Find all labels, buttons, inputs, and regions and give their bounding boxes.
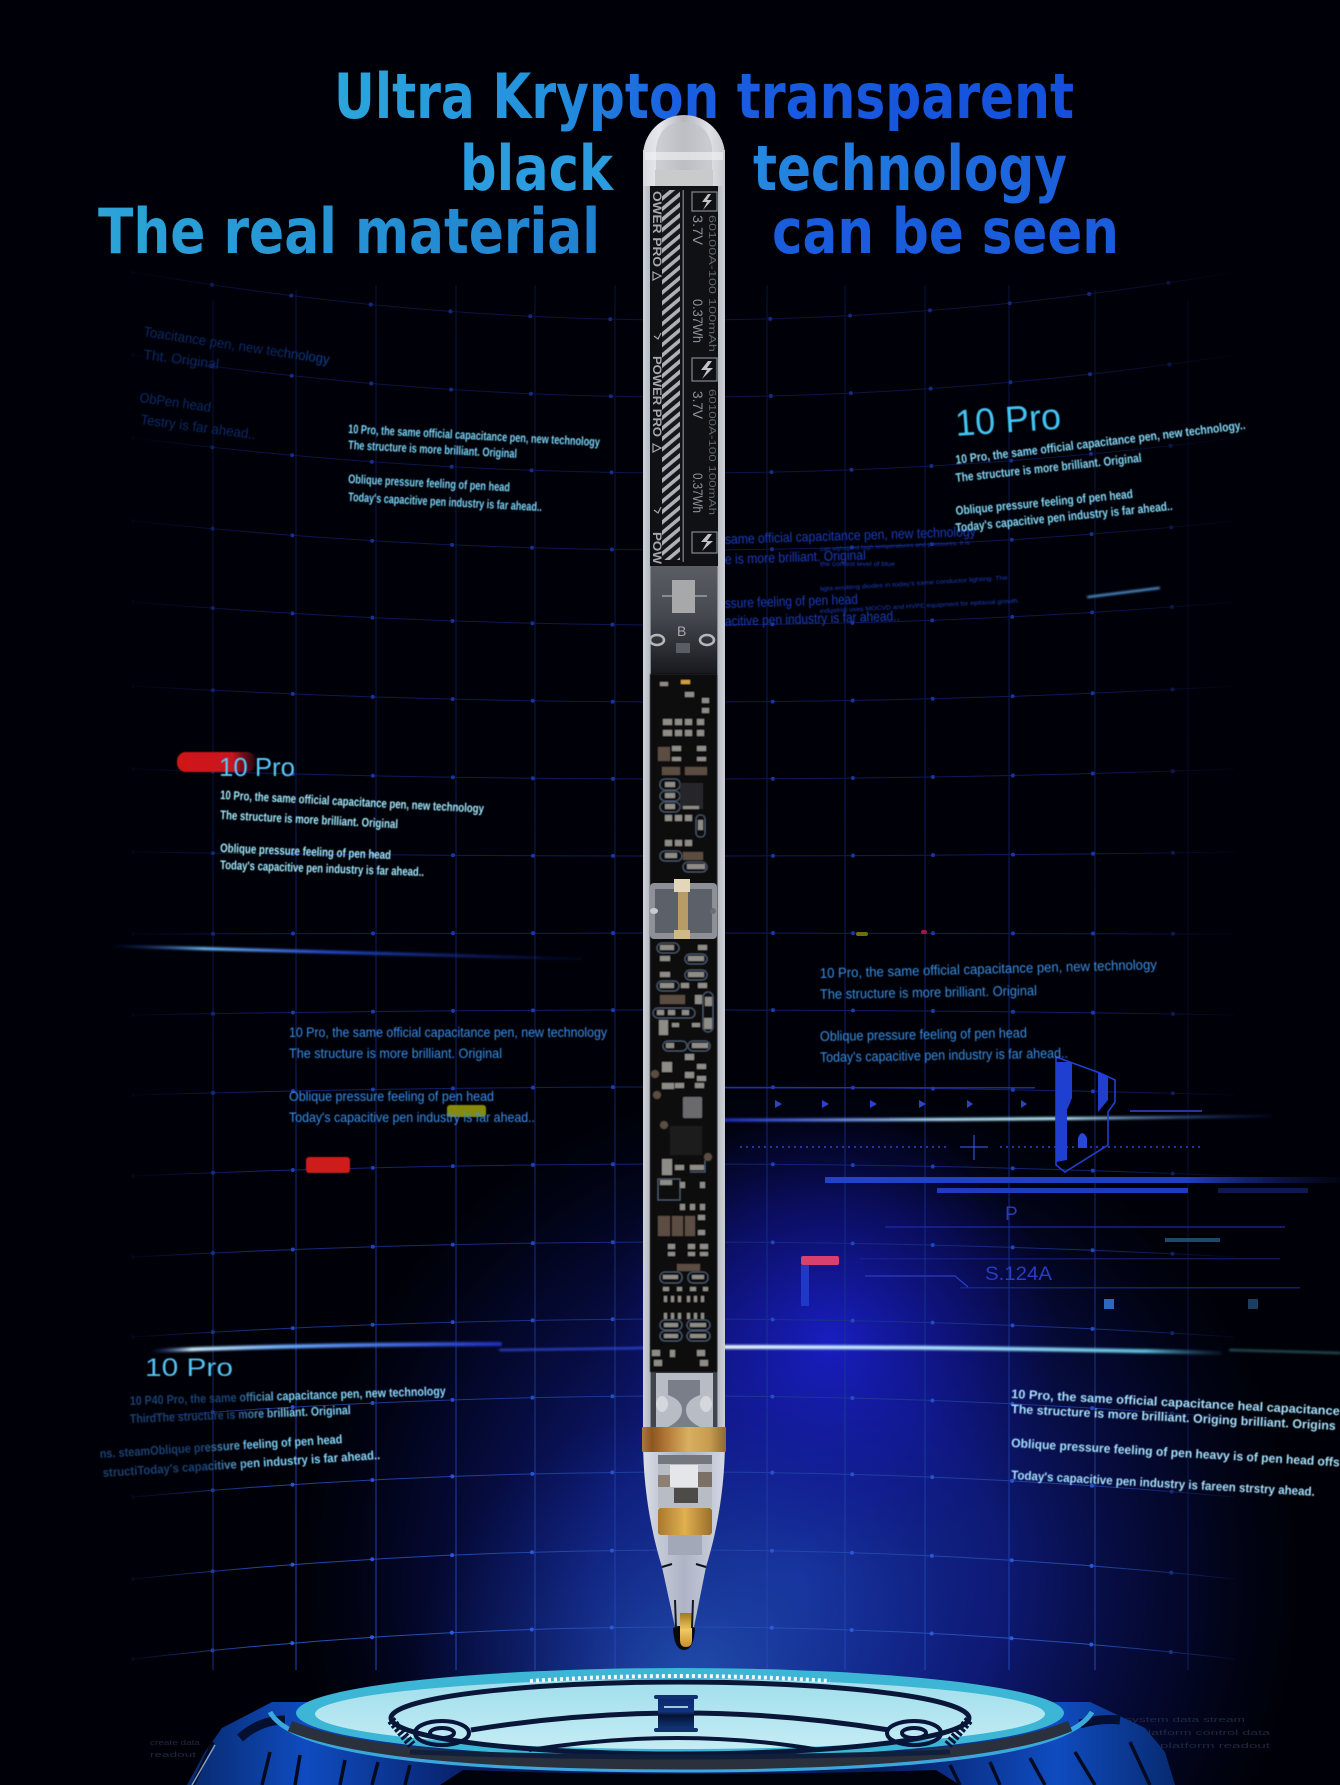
pen shaft detail (662, 1535, 706, 1567)
pen gold knurl (658, 1508, 712, 1535)
pen upper connector: B (677, 623, 686, 639)
red marker (801, 1256, 839, 1265)
dim HUD text near platform: readout (150, 1752, 196, 1759)
platform light disc (315, 1679, 1045, 1749)
battery printing: POW (650, 532, 662, 564)
text block: centre left: Today's capacitive pen industry is far ahead.. (289, 1109, 535, 1125)
heading: 10 Pro (954, 396, 1062, 444)
platform left gear (415, 1721, 469, 1745)
dim HUD text near platform: create data (150, 1740, 200, 1747)
text block: ghost text centre right: ssure feeling of pen head (725, 591, 858, 611)
body copy: ns. steamOblique pressure feeling of pen head (99, 1432, 343, 1461)
pen battery section: 3.7V (690, 391, 706, 420)
coloured marker: yellow pill (447, 1105, 486, 1117)
body copy: Today's capacitive pen industry is far ahead.. (955, 499, 1173, 535)
platform ribs (193, 1742, 1150, 1785)
text block: centre left: The structure is more brilliant. Original (289, 1045, 502, 1061)
dim HUD text near platform: platform control data (1140, 1730, 1270, 1737)
dim HUD text near platform: system data stream (1125, 1717, 1245, 1724)
text block: upper centre left: Today's capacitive pen industry is far ahead.. (348, 490, 542, 514)
platform lower band highlight (410, 1752, 950, 1757)
text block: upper centre left: Oblique pressure feeling of pen head (348, 472, 510, 494)
text block: centre left: 10 Pro, the same official capacitance pen, new technology (289, 1024, 607, 1040)
text block: ghost text centre right: light-emitting diodes in today's same conductor lighting. The (820, 575, 1009, 593)
body copy (220, 788, 484, 879)
board trace outlines (653, 779, 713, 1341)
pen (642, 115, 726, 1650)
text block: upper centre left (348, 422, 600, 514)
title: can be seen (772, 195, 1119, 268)
pen nib (673, 1600, 695, 1650)
pen circuit board (650, 674, 717, 1372)
pen battery section: 60100A-100 100mAh (706, 215, 717, 352)
platform teeth (530, 1676, 830, 1681)
pen battery section (650, 186, 718, 566)
perspective grid (133, 272, 1235, 1670)
text block: upper right (954, 396, 1246, 535)
platform outer rim (270, 1712, 1092, 1770)
background glow (300, 1080, 1340, 1785)
text block: faded upper left (139, 323, 331, 442)
HUD label: P (1005, 1204, 1018, 1225)
text block: lower right: The structure is more brilliant. Origing brilliant. Origins (1011, 1402, 1336, 1433)
pen centre clip (650, 879, 717, 939)
platform cyan ring (296, 1668, 1064, 1758)
battery printing: OWER PRO (650, 191, 662, 267)
platform central pillar (654, 1695, 698, 1732)
battery printing (650, 191, 662, 564)
text block: faded upper left: Toacitance pen, new technology (143, 323, 331, 367)
text block: ghost text centre right: same official capacitance pen, new technology (725, 523, 976, 547)
text block: ghost text centre right: the contest level of blue (820, 562, 896, 568)
text block: centre right: Oblique pressure feeling of pen head (820, 1024, 1027, 1044)
platform (187, 1668, 1175, 1785)
text block: ghost text centre right (725, 523, 1020, 629)
platform black rings (391, 1682, 969, 1754)
pen gold band (642, 1427, 726, 1452)
title: The real material (98, 195, 600, 268)
platform dark base (440, 1770, 960, 1785)
HUD graphics lower right (720, 1057, 1340, 1309)
pen lower connector (656, 1373, 713, 1427)
glowing light streaks (110, 588, 1340, 1353)
text block: centre left: Oblique pressure feeling of pen head (289, 1088, 494, 1104)
battery printing: POWER PRO (650, 356, 662, 437)
pen cone (643, 1440, 725, 1627)
body copy (99, 1384, 446, 1480)
board amber led (681, 680, 690, 684)
text block: centre right: 10 Pro, the same official capacitance pen, new technology (820, 956, 1157, 981)
text block: faded upper left: Testry is far ahead.. (140, 411, 257, 442)
body copy: Oblique pressure feeling of pen head (955, 487, 1133, 518)
board brown components (651, 747, 712, 1271)
body copy: structiToday's capacitive pen industry is far ahead.. (102, 1448, 381, 1480)
coloured marker: small dots (856, 930, 927, 936)
text block: centre left (289, 1024, 607, 1125)
text block: centre right (820, 956, 1157, 1065)
text block: upper centre left: The structure is more brilliant. Original (348, 438, 517, 461)
platform body (187, 1702, 1175, 1785)
board dark chips (670, 783, 703, 1155)
battery bolt icons (692, 192, 717, 553)
body copy: 10 Pro, the same official capacitance pen, new technology (220, 788, 484, 816)
pen battery section: 0.37Wh (690, 299, 706, 343)
pen barrel (643, 150, 725, 1440)
pen internal mechanism (658, 1455, 712, 1508)
pen battery section: 3.7V (690, 215, 706, 246)
text block: centre right: Today's capacitive pen industry is far ahead.. (820, 1045, 1068, 1065)
text block: upper centre left: 10 Pro, the same official capacitance pen, new technology (348, 422, 600, 449)
body copy: 10 Pro, the same official capacitance pen, new technology.. (955, 418, 1246, 467)
body copy: The structure is more brilliant. Original (955, 451, 1142, 485)
HUD label: S.124A (985, 1264, 1052, 1285)
pen dome cap (643, 115, 725, 186)
title: Ultra Krypton transparent (334, 60, 1074, 133)
pen upper connector (650, 566, 717, 674)
body copy: ThirdThe structure is more brilliant. Original (130, 1403, 351, 1426)
platform right gear (887, 1721, 941, 1745)
text block: ghost text centre right: industrial uses MOCVD and HVPE equipment for epitaxial growth. (820, 599, 1020, 615)
body copy (955, 418, 1246, 535)
text block: lower right (1011, 1387, 1340, 1499)
dim HUD text near platform: platform readout (1160, 1743, 1270, 1750)
arrow markers (775, 1100, 1027, 1108)
square markers (1104, 1299, 1258, 1309)
coloured marker: red pill (177, 752, 256, 772)
pen battery section: 0.37Wh (690, 473, 706, 513)
dim HUD text near platform (150, 1717, 1270, 1759)
text block: faded upper left: Tht. Original (143, 346, 220, 372)
title: technology (753, 132, 1067, 205)
text block: lower right: Today's capacitive pen industry is fareen strstry ahead. (1011, 1468, 1315, 1499)
body copy: Oblique pressure feeling of pen head (220, 841, 391, 862)
HUD bars (825, 1177, 1340, 1183)
heading: 10 Pro (219, 752, 295, 782)
board silver components (652, 682, 712, 1366)
text block: centre right: The structure is more brilliant. Original (820, 982, 1037, 1002)
text block: ghost text centre right: e is more brilliant. Original (725, 547, 866, 567)
heading: 10 Pro (145, 1354, 233, 1382)
body copy: 10 P40 Pro, the same official capacitance pen, new technology (130, 1384, 446, 1408)
title: black (460, 132, 614, 205)
battery stripes (662, 190, 680, 560)
coloured marker: red pill (306, 1157, 350, 1173)
body copy: Today's capacitive pen industry is far ahead.. (220, 858, 424, 879)
icon: shield outline (1056, 1057, 1115, 1172)
board grey module (683, 1097, 702, 1118)
text block: ghost text centre right: can withstand high temperatures and pressures. It is (820, 540, 970, 553)
title (98, 60, 1119, 268)
pen battery section: 60100A-100 100mAh (706, 389, 717, 515)
text block: lower left (99, 1354, 446, 1480)
text block: ghost text centre right: acitive pen industry is far ahead.. (725, 608, 900, 629)
text block: lower right: 10 Pro, the same official capacitance heal capacitance (1011, 1387, 1340, 1418)
body copy: The structure is more brilliant. Original (220, 808, 398, 831)
text block: faded upper left: ObPen head (139, 389, 212, 415)
text block: middle left (219, 752, 484, 879)
